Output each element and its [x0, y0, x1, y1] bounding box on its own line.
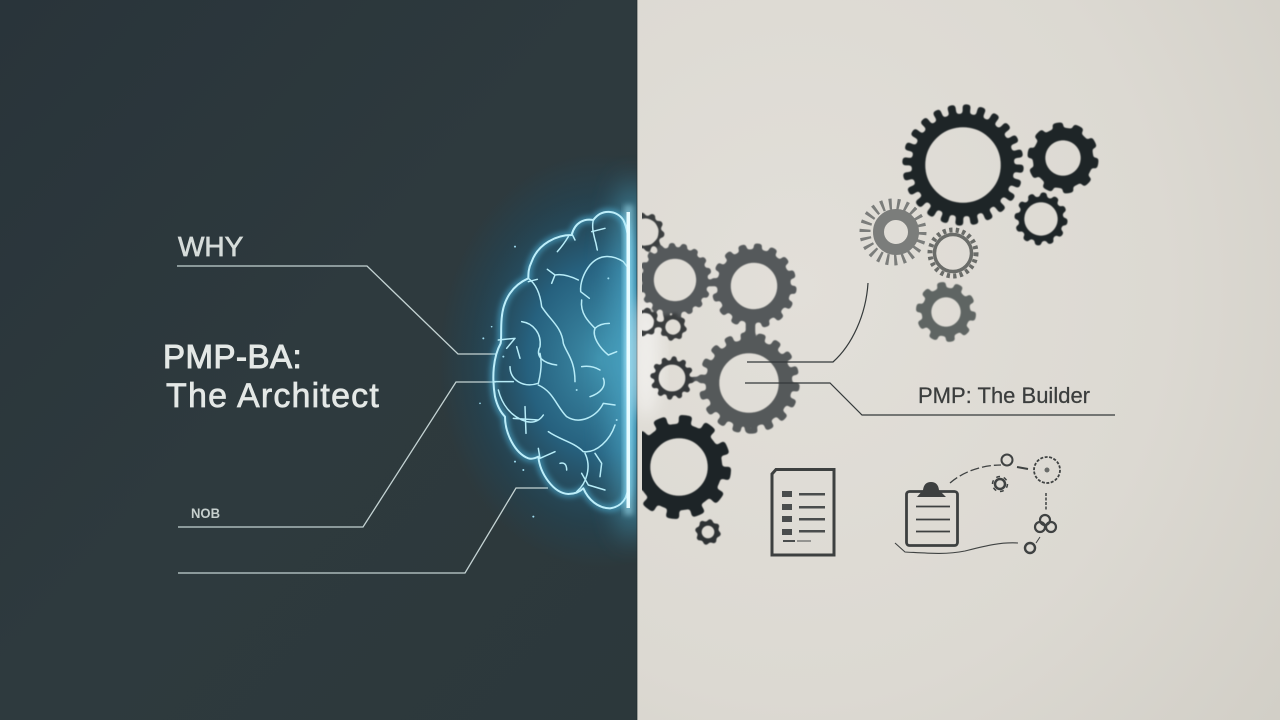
gear: upper left	[641, 246, 709, 314]
connector lines: right side	[745, 283, 1115, 415]
divider: glowing central seam	[624, 0, 660, 720]
brain outer outline	[493, 212, 629, 508]
gear: tiny partial	[632, 309, 658, 335]
icon: clipboard	[906, 482, 958, 546]
brain glow halo	[458, 167, 637, 552]
icon: workflow network	[895, 454, 1060, 553]
gear: partial top	[642, 212, 666, 254]
gears cluster: top right	[865, 110, 1095, 339]
gear connector	[746, 322, 755, 346]
label: PMP The Builder: PMP: The Builder	[918, 383, 1090, 408]
heading: WHY: WHY	[178, 231, 244, 262]
gear: upper right	[715, 247, 793, 325]
gear: lower right dark	[1017, 195, 1065, 243]
heading: The Architect: The Architect	[166, 377, 380, 415]
gear: grey spiky	[865, 204, 921, 260]
icon: glowing brain	[479, 212, 629, 518]
gear connector small	[693, 377, 707, 380]
panel: light right background	[637, 0, 1280, 720]
gear: grey lower	[919, 285, 973, 339]
brain glow layer	[493, 212, 629, 508]
panel: dark left background	[0, 0, 638, 720]
gear: grey thin	[930, 230, 976, 276]
gear: tiny bottom	[696, 520, 720, 544]
gear: small centre	[652, 358, 692, 398]
gear: black lower	[632, 420, 726, 514]
connector lines: left side	[177, 266, 548, 573]
gears cluster: centre, cut by seam	[627, 214, 796, 544]
gear: large centre	[702, 336, 796, 430]
brain folds	[493, 220, 628, 492]
heading: PMP-BA: PMP-BA:	[163, 338, 302, 375]
gear: tiny	[660, 314, 686, 340]
icon: checklist document	[772, 470, 834, 555]
gear: big dark	[908, 110, 1018, 220]
gear: right dark	[1031, 126, 1095, 190]
brain sparkles	[479, 246, 618, 518]
small label: NOB: NOB	[191, 506, 220, 521]
